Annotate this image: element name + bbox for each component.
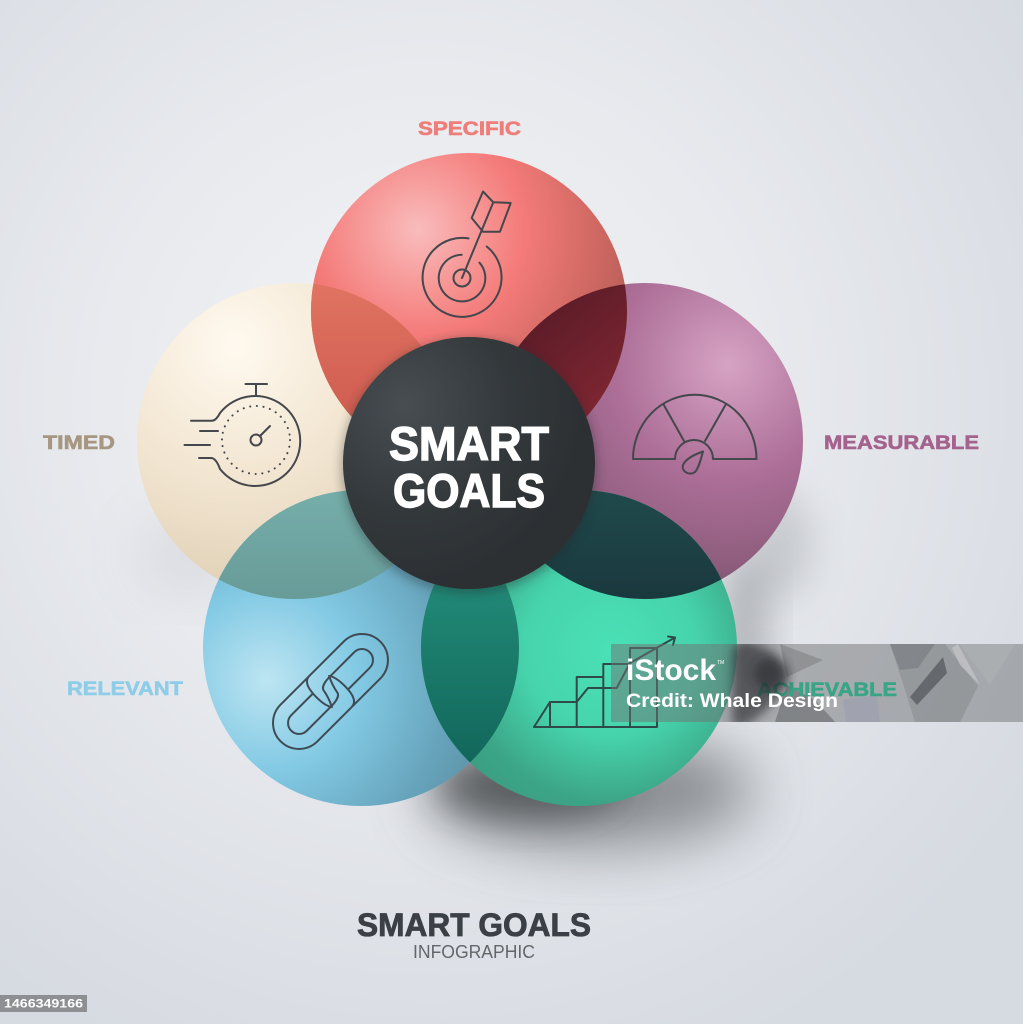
footer title: SMART GOALS [357,907,591,943]
sphere: achievable [421,490,737,806]
icon: chain links [262,623,399,760]
label: measurable: MEASURABLE [824,432,979,454]
watermark band [611,644,1023,722]
centre title [389,417,549,517]
icon: gauge [633,395,756,474]
image id tag [0,995,87,1012]
icon: target with arrow [423,192,511,317]
overlap: relevant and achievable [421,584,519,762]
icon: growth steps with arrow [534,636,675,727]
sphere: specific [311,153,627,469]
image id tag: 1466349166 [4,998,83,1010]
label: specific: SPECIFIC [418,118,521,140]
icon: stopwatch [184,384,300,486]
sphere: relevant [203,490,519,806]
label: achievable: ACHIEVABLE [757,679,897,701]
watermark text: iStock [626,654,716,687]
overlap: timed and relevant [218,490,394,599]
watermark dark sphere fragment [732,640,789,726]
sphere: timed [137,283,453,599]
sphere: measurable [487,283,803,599]
overlap: specific and timed [311,284,422,417]
centre circle shadow [341,338,597,594]
centre circle [343,337,595,589]
watermark text: TM [717,660,724,666]
label: relevant: RELEVANT [67,678,183,700]
centre title: GOALS [393,464,545,517]
footer title [357,907,591,962]
sphere drop shadows [140,490,812,848]
overlap: specific and measurable [518,284,627,417]
centre title: SMART [389,417,549,470]
overlap: measurable and achievable [545,490,722,599]
label: timed: TIMED [43,432,115,454]
watermark text [626,654,838,712]
footer title: INFOGRAPHIC [413,942,535,962]
watermark text: Credit: Whale Design [626,691,838,712]
